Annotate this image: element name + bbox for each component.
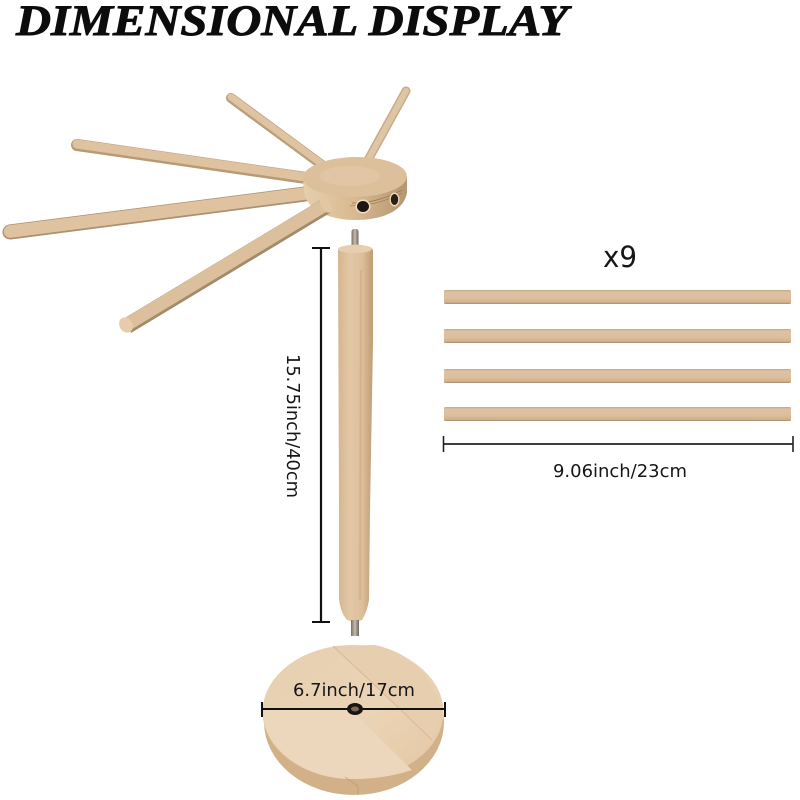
arm: long left — [10, 194, 305, 232]
rod 4 — [444, 407, 791, 421]
base dimension line — [262, 702, 445, 717]
pole bottom pin — [351, 620, 359, 636]
base disc — [262, 645, 444, 795]
hub hole side — [390, 192, 400, 206]
rod length dimension line — [443, 436, 793, 452]
rod 2 — [444, 329, 791, 343]
loose rods — [444, 290, 791, 421]
arm: upper left — [231, 97, 322, 165]
pole — [338, 229, 373, 636]
vertical dimension line — [312, 248, 330, 622]
label: base diameter: 6.7inch/17cm — [293, 680, 415, 701]
pole top pin — [352, 229, 358, 248]
label: quantity x9: x9 — [603, 240, 637, 274]
rod 3 — [444, 369, 791, 383]
arm: left — [77, 144, 306, 178]
label: pole height: 15.75inch/40cm — [282, 354, 303, 498]
arm: upper right — [368, 91, 406, 160]
base centre hole — [347, 703, 363, 715]
hub — [303, 156, 407, 220]
arm: lower front — [116, 195, 335, 335]
hub hole front — [356, 200, 370, 214]
rod 1 — [444, 290, 791, 304]
label: rod length: 9.06inch/23cm — [553, 461, 687, 482]
drying rack top: hub with five arms — [10, 91, 407, 335]
